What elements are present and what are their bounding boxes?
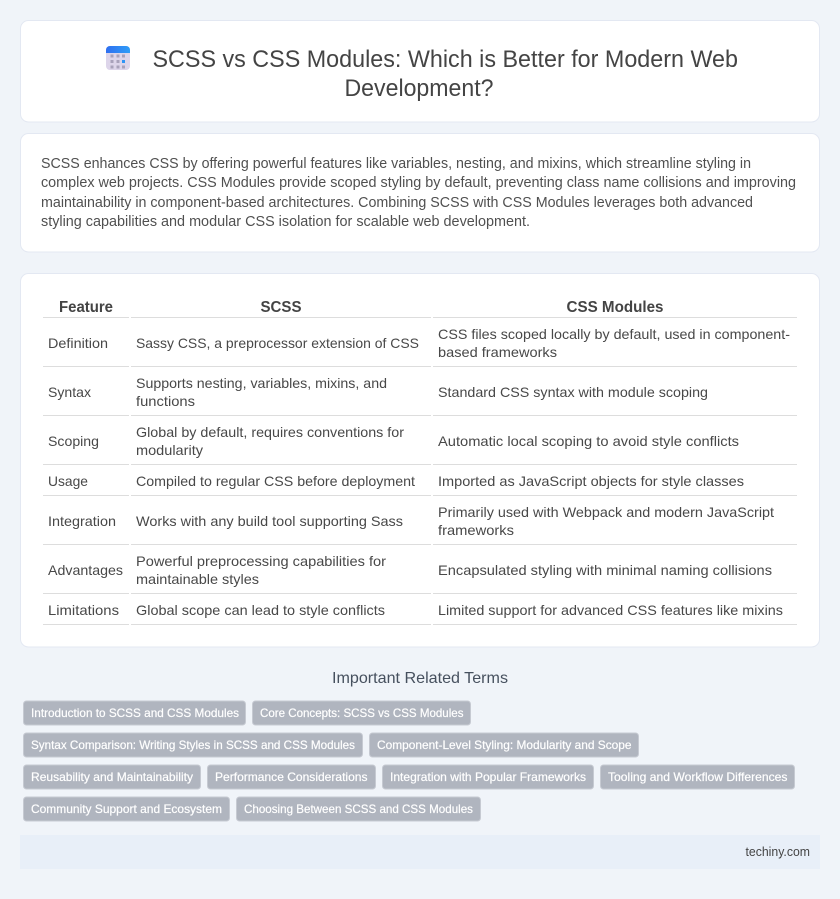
icon: calendar <box>106 46 130 70</box>
tag: Performance Considerations <box>215 770 368 784</box>
row: usage <box>48 473 744 489</box>
panel: header <box>20 20 820 122</box>
row: usage: Usage <box>48 473 88 489</box>
tag: Syntax Comparison: Writing Styles in SCSS and CSS Modules <box>31 738 355 752</box>
tag <box>24 701 246 725</box>
row: definition: Definition <box>48 335 108 351</box>
row: advantages: Advantages <box>48 562 123 578</box>
tag: Community Support and Ecosystem <box>31 802 222 816</box>
tag <box>252 701 470 725</box>
tag <box>24 733 362 757</box>
row: limitations: Limited support for advanced CSS features like mixins <box>438 602 783 618</box>
row: usage: Compiled to regular CSS before deployment <box>136 473 415 489</box>
footer <box>20 835 820 869</box>
row: scoping: modularity <box>136 442 203 458</box>
row: definition: CSS files scoped locally by default, used in component- <box>438 326 790 342</box>
tag <box>370 733 638 757</box>
heading: important related terms: Important Related Terms <box>332 670 508 687</box>
intro text block: maintainability in component-based architectures. Combining SCSS with CSS Modules leverages both advanced <box>41 195 753 211</box>
tag: Tooling and Workflow Differences <box>608 770 788 784</box>
title <box>152 46 738 102</box>
row: definition: Sassy CSS, a preprocessor extension of CSS <box>136 335 419 351</box>
row: syntax: Syntax <box>48 384 91 400</box>
tag: Core Concepts: SCSS vs CSS Modules <box>260 706 464 720</box>
row: syntax: Standard CSS syntax with module scoping <box>438 384 708 400</box>
row: integration: Integration <box>48 513 116 529</box>
row: limitations: Global scope can lead to style conflicts <box>136 602 385 618</box>
row: usage: Imported as JavaScript objects for style classes <box>438 473 744 489</box>
panel: comparison table <box>20 274 820 647</box>
row: definition: based frameworks <box>438 344 557 360</box>
row: scoping <box>48 424 739 458</box>
title: Development? <box>344 75 494 102</box>
related term tags <box>24 701 794 821</box>
tag: Component-Level Styling: Modularity and Scope <box>377 738 632 752</box>
row: advantages: Powerful preprocessing capabilities for <box>136 553 386 569</box>
footer: techiny.com <box>746 844 810 859</box>
table header row <box>59 299 664 316</box>
tag: Reusability and Maintainability <box>31 770 193 784</box>
panel: introduction <box>20 134 820 252</box>
row: advantages <box>48 553 772 587</box>
row: integration: Works with any build tool supporting Sass <box>136 513 403 529</box>
row: limitations: Limitations <box>48 602 119 618</box>
row: scoping: Scoping <box>48 433 99 449</box>
tag <box>382 765 594 789</box>
row: syntax: functions <box>136 393 195 409</box>
table header row: Feature <box>59 299 113 316</box>
intro text block: styling capabilities and modular CSS isolation for scalable web development. <box>41 214 530 230</box>
row: integration <box>48 504 774 538</box>
tag: Choosing Between SCSS and CSS Modules <box>244 802 473 816</box>
intro text block <box>41 156 796 230</box>
tag <box>236 797 480 821</box>
tag <box>24 765 200 789</box>
row: integration: frameworks <box>438 522 514 538</box>
table header row: SCSS <box>260 299 302 316</box>
row: syntax: Supports nesting, variables, mixins, and <box>136 375 387 391</box>
intro text block: complex web projects. CSS Modules provide scoped styling by default, preventing class name collisions and improving <box>41 175 796 191</box>
tag: Introduction to SCSS and CSS Modules <box>31 706 239 720</box>
table header row: CSS Modules <box>566 299 664 316</box>
tag: Integration with Popular Frameworks <box>390 770 586 784</box>
row: integration: Primarily used with Webpack and modern JavaScript <box>438 504 774 520</box>
tag <box>600 765 794 789</box>
intro text block: SCSS enhances CSS by offering powerful features like variables, nesting, and mixins, which streamline styling in <box>41 156 751 172</box>
row: scoping: Automatic local scoping to avoid style conflicts <box>438 433 739 449</box>
row: scoping: Global by default, requires conventions for <box>136 424 404 440</box>
title: SCSS vs CSS Modules: Which is Better for Modern Web <box>152 46 738 73</box>
tag <box>24 797 230 821</box>
row: advantages: maintainable styles <box>136 571 259 587</box>
row: limitations <box>48 602 783 618</box>
tag <box>208 765 376 789</box>
row: advantages: Encapsulated styling with minimal naming collisions <box>438 562 772 578</box>
row: definition <box>48 326 790 360</box>
row: syntax <box>48 375 708 409</box>
